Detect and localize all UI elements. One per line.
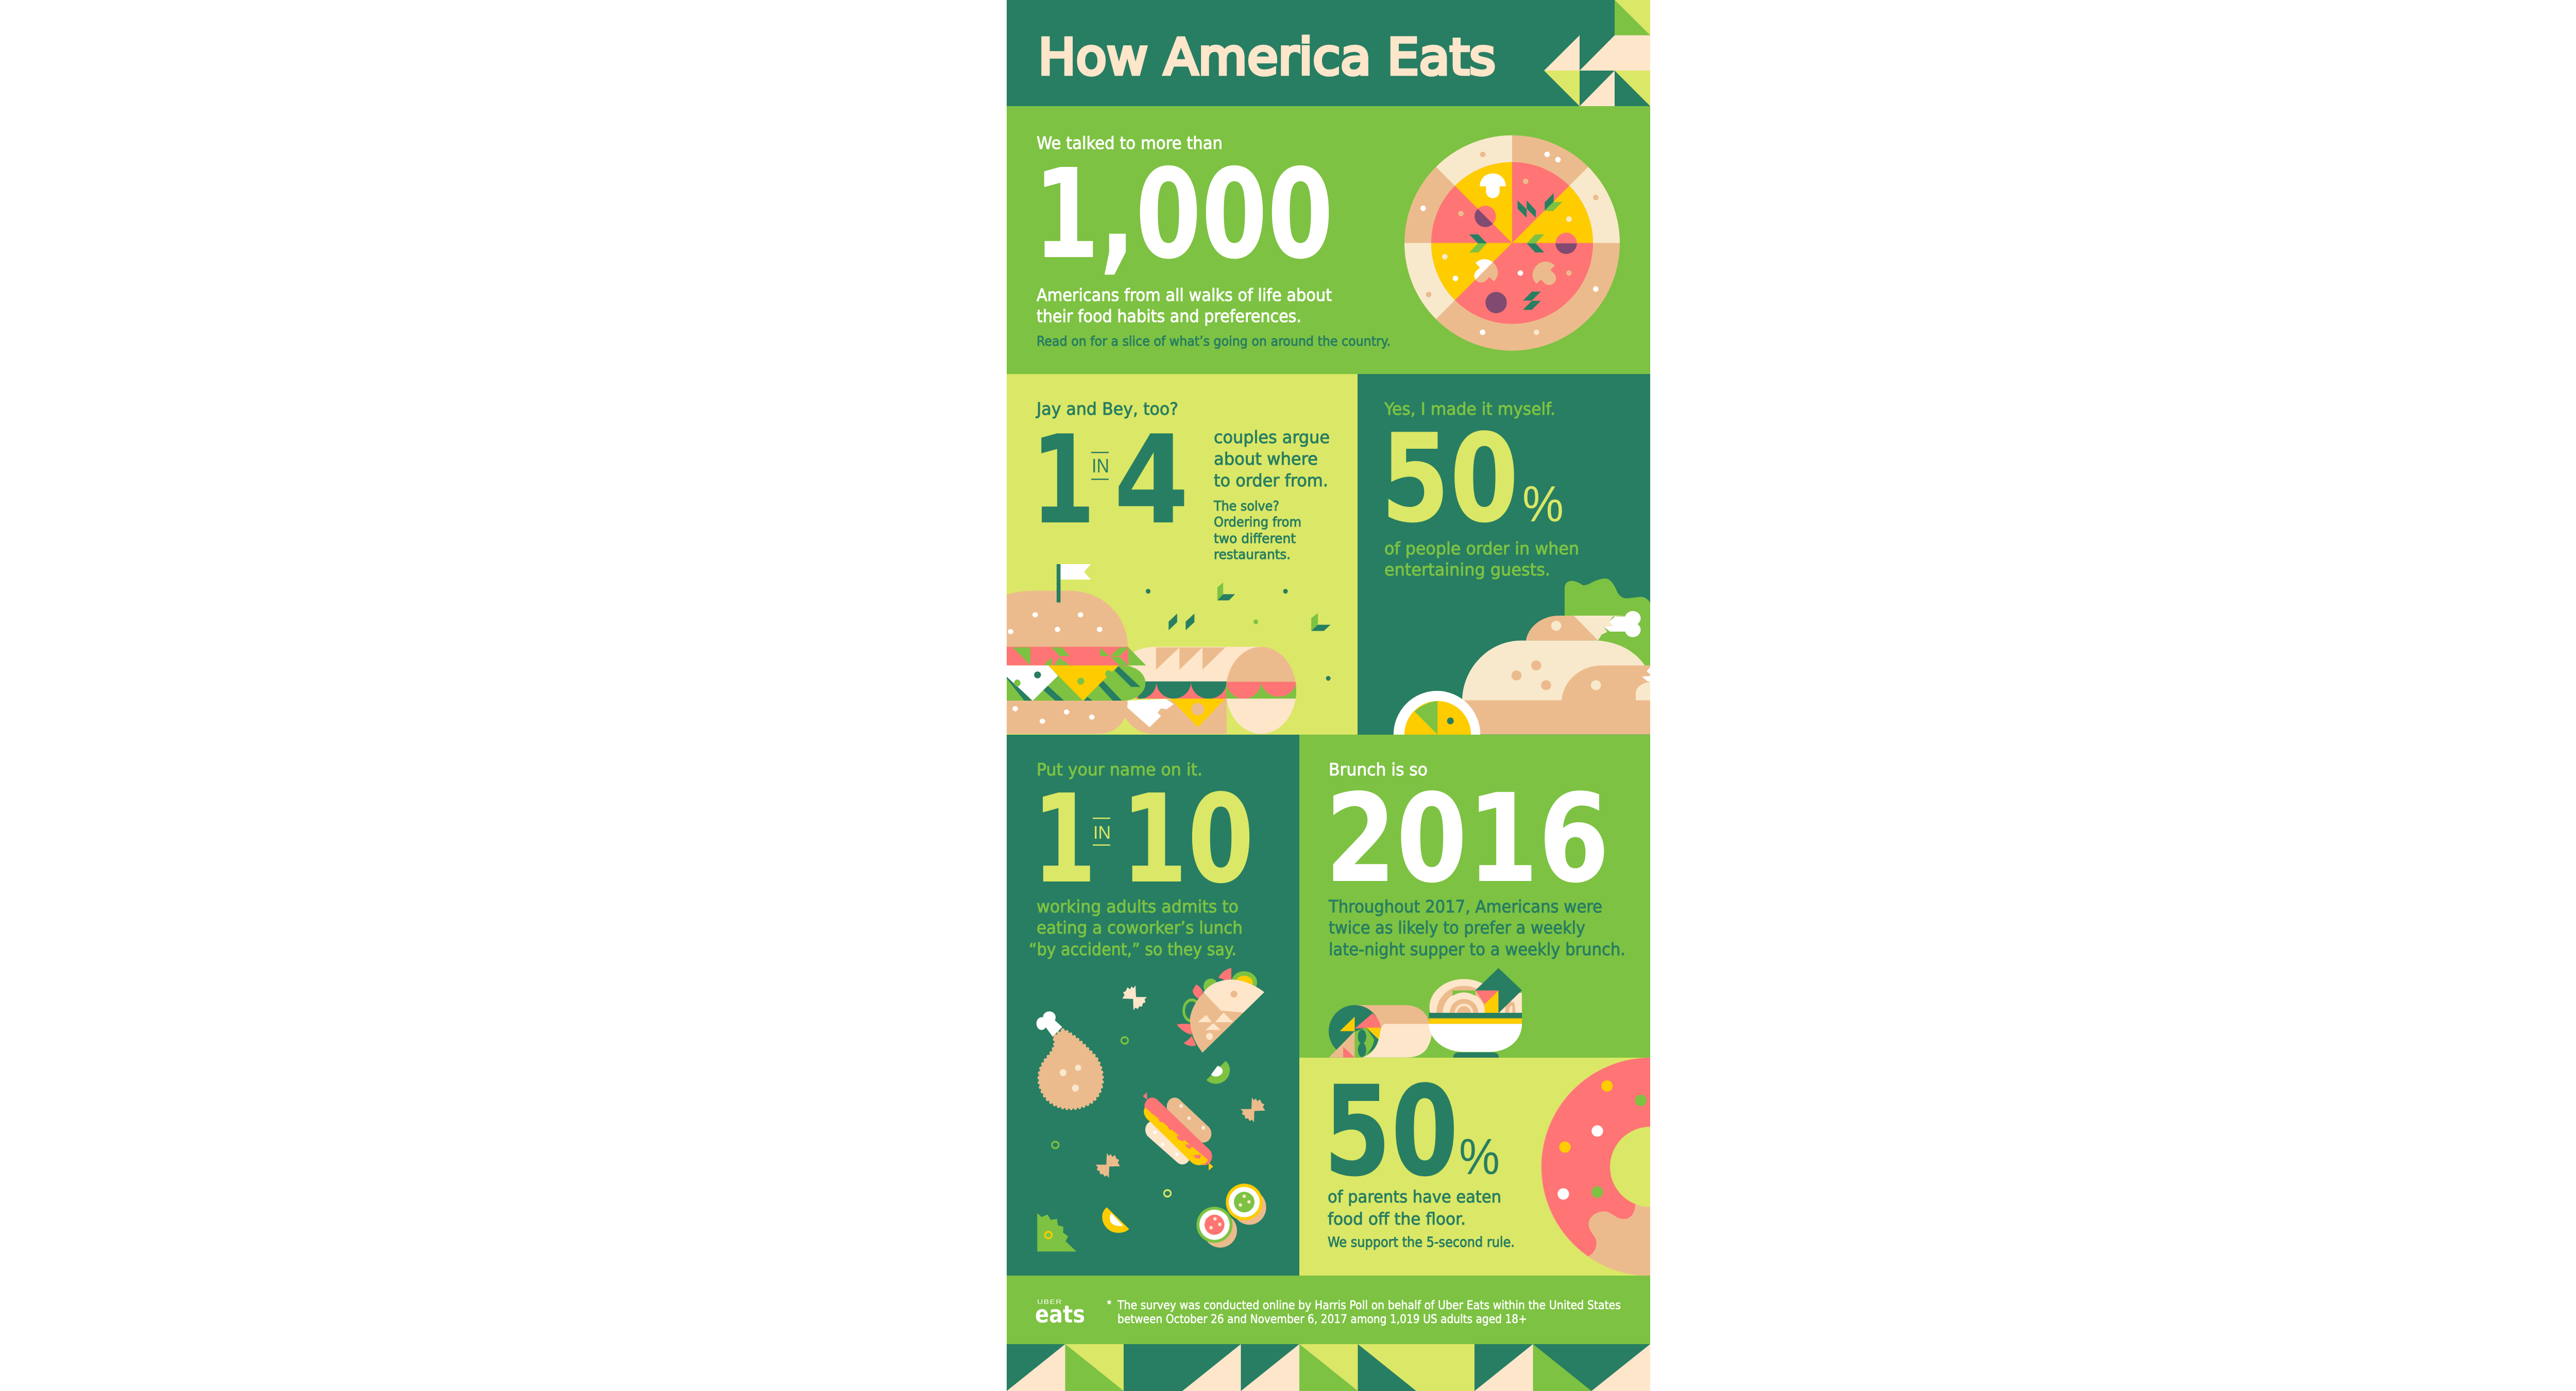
couples description: couples argue	[1214, 427, 1330, 447]
lunch description: eating a coworker’s lunch	[1037, 918, 1243, 938]
title: How America Eats	[1038, 28, 1496, 86]
intro note: Read on for a slice of what’s going on around the country.	[1037, 334, 1391, 349]
icon: yellow wedge	[1102, 1207, 1129, 1233]
guests description	[1384, 538, 1579, 580]
stat: 1 in 10: 10	[1121, 768, 1254, 910]
icon: drumstick	[1037, 1011, 1103, 1109]
stat: 1 in 10: 1	[1032, 768, 1096, 910]
couples solution note: restaurants.	[1214, 547, 1291, 563]
stat: 1 in 4: IN	[1092, 455, 1109, 477]
parents note: We support the 5-second rule.	[1328, 1234, 1515, 1250]
illustration: roast chicken	[1393, 579, 1650, 735]
couples solution note: two different	[1214, 531, 1296, 547]
brunch description: Throughout 2017, Americans were	[1328, 896, 1602, 917]
parents description	[1328, 1187, 1501, 1229]
guests description: of people order in when	[1384, 538, 1579, 558]
stat: 50% parents: 50	[1324, 1059, 1459, 1205]
lunch description: working adults admits to	[1037, 896, 1239, 917]
icon: pasta bow ties	[1095, 986, 1265, 1178]
intro description: their food habits and preferences.	[1037, 306, 1301, 326]
couples solution note: The solve?	[1213, 499, 1279, 514]
parents description: food off the floor.	[1328, 1209, 1466, 1229]
panel: 1,000 Americans intro	[1007, 106, 1650, 374]
stat: 50%: 50	[1381, 408, 1519, 550]
icon: rings	[1052, 1037, 1171, 1197]
intro description	[1037, 285, 1332, 326]
panel: 1 in 10 lunch thieves	[1007, 735, 1299, 1276]
intro description: Americans from all walks of life about	[1037, 285, 1332, 305]
icon: sushi rolls	[1196, 1184, 1266, 1248]
survey footnote: The survey was conducted online by Harris Poll on behalf of Uber Eats within the United States	[1117, 1299, 1621, 1312]
intro lead-in: We talked to more than	[1037, 133, 1223, 153]
illustration: burger and sub	[1000, 564, 1331, 735]
brunch description	[1328, 896, 1625, 959]
lunch description: “by accident,” so they say.	[1029, 939, 1236, 959]
panel: 50% entertaining guests	[1358, 374, 1650, 735]
big number 2016: 2016	[1325, 768, 1609, 910]
guests description: entertaining guests.	[1384, 559, 1550, 580]
couples solution note: Ordering from	[1214, 515, 1301, 530]
parents description: of parents have eaten	[1328, 1187, 1501, 1207]
stat: 1 in 10: IN	[1093, 823, 1111, 843]
survey footnote: *	[1107, 1299, 1111, 1310]
icon: donut	[1541, 1058, 1650, 1276]
couples description: to order from.	[1214, 470, 1328, 490]
brunch description: late-night supper to a weekly brunch.	[1329, 939, 1625, 959]
lunch heading: Put your name on it.	[1037, 759, 1202, 779]
icon: pizza	[1404, 135, 1620, 351]
illustration: scattered lunch foods	[1037, 968, 1266, 1251]
illustration: wrap and noodle bowl	[1329, 968, 1522, 1058]
footer triangle pattern	[1007, 1344, 1650, 1391]
icon: lime wedge	[1207, 1061, 1230, 1084]
lunch description	[1029, 896, 1243, 959]
survey footnote: between October 26 and November 6, 2017 among 1,019 US adults aged 18+	[1117, 1313, 1527, 1326]
stat: 1 in 4: 4	[1114, 409, 1189, 551]
logo: Uber Eats: eats	[1035, 1300, 1085, 1328]
couples heading: Jay and Bey, too?	[1036, 399, 1178, 419]
guests heading: Yes, I made it myself.	[1384, 399, 1555, 419]
brunch description: twice as likely to prefer a weekly	[1329, 918, 1585, 938]
stat: 1 in 4	[1031, 409, 1189, 551]
panel: header	[1007, 0, 1650, 106]
header triangle pattern	[1544, 0, 1650, 106]
panel: footer	[1007, 1276, 1650, 1344]
panel: brunch is so 2016	[1299, 735, 1650, 1058]
icon: taco	[1177, 968, 1264, 1053]
couples solution note	[1213, 499, 1301, 563]
icon: green leaf with ring	[1037, 1213, 1076, 1251]
couples description: about where	[1214, 449, 1318, 469]
infographic: How America Eats	[1007, 0, 1650, 1391]
couples description	[1214, 427, 1330, 490]
stat: 1 in 10	[1032, 768, 1254, 910]
big number 1,000: 1,000	[1033, 142, 1333, 286]
survey footnote	[1107, 1299, 1621, 1326]
panel: 50% parents food off the floor	[1299, 1058, 1650, 1276]
stat: 50%: %	[1522, 476, 1564, 532]
icon: hot dog	[1143, 1092, 1213, 1171]
stat: 50% parents: %	[1459, 1128, 1500, 1185]
brunch heading: Brunch is so	[1329, 759, 1428, 779]
panel: 1 in 4 couples	[1000, 374, 1358, 735]
stat: 1 in 4: 1	[1031, 409, 1095, 551]
logo: Uber Eats: UBER	[1037, 1298, 1062, 1305]
